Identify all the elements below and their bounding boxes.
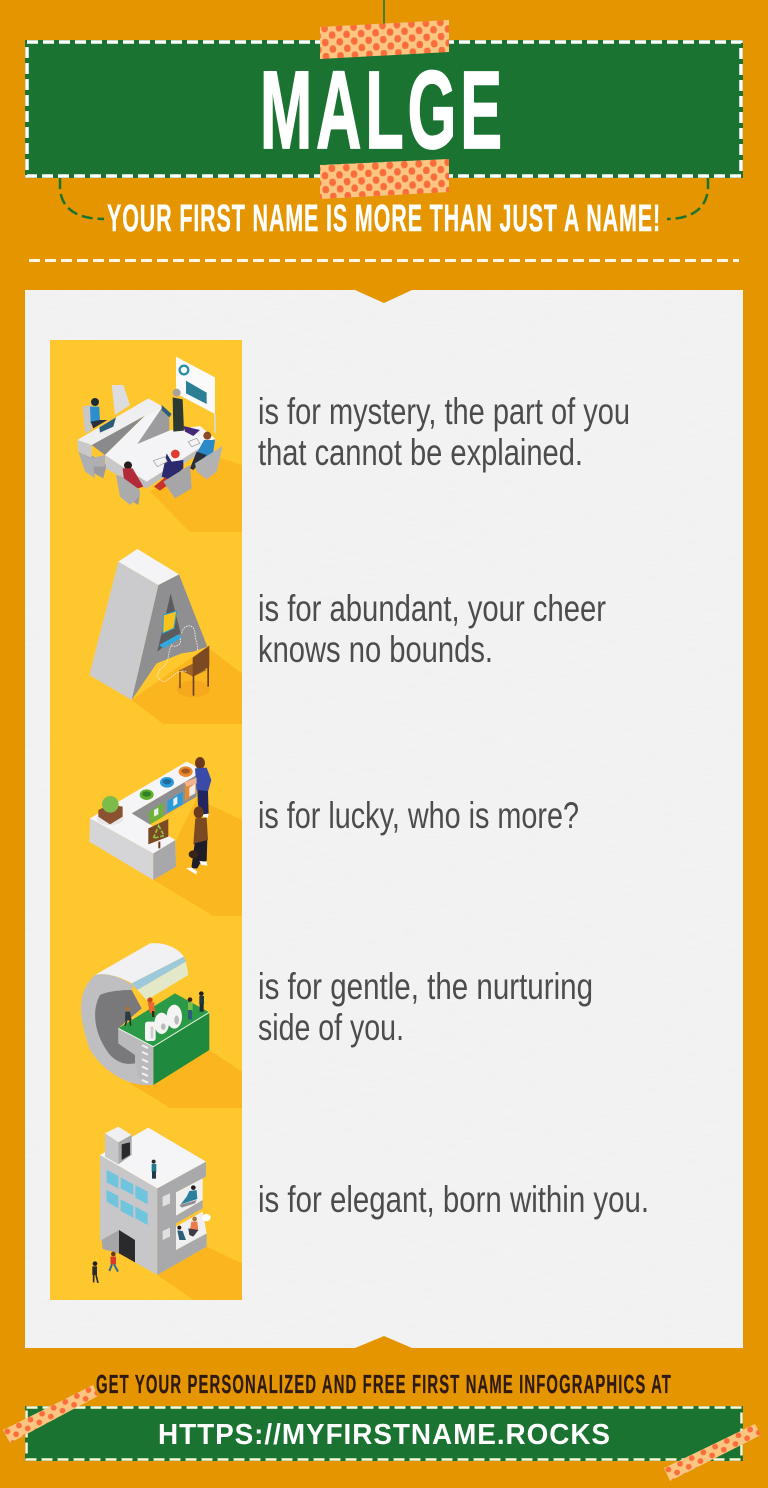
text: G line 2: side of you. [258,1007,404,1048]
hanging dashed string [383,0,385,24]
person: on roof [152,1160,156,1179]
person: walker [125,1007,132,1026]
text: L line: is for lucky, who is more? [258,795,579,836]
person: kicking [147,997,155,1017]
person: red shirt [109,1252,118,1272]
windows [107,1170,148,1225]
icon: planter [97,796,123,825]
tape: bottom [320,159,449,199]
footer banner [25,1406,743,1461]
title: MALGE [260,49,506,172]
icon: recycling sign [148,819,168,848]
numerals 123 [145,1005,182,1041]
person: brown jacket [186,806,208,874]
text: M line 2: that cannot be explained. [258,432,583,473]
yellow illustration column [50,340,242,1300]
illustration: letter A with desk [89,549,242,724]
dashed curve: left [60,178,104,219]
illustration: letter M meeting table [77,357,242,532]
white dashed divider [29,259,739,262]
person: dark suit [92,1261,98,1283]
footer url: HTTPS://MYFIRSTNAME.ROCKS [158,1419,611,1451]
tape: footer left [3,1385,98,1443]
text: A line: is for abundant, your cheer [258,588,606,629]
tape: top [320,20,449,59]
text: A line 2: knows no bounds. [258,629,493,670]
text: E line: is for elegant, born within you. [258,1179,649,1220]
text: M line: is for mystery, the part of you [258,391,630,432]
person: green [188,997,193,1019]
dashed curve: right [667,178,708,219]
person: blue shirt [184,757,211,818]
illustration: letter E building [92,1127,242,1300]
text: G line: is for gentle, the nurturing [258,966,593,1007]
illustration: letter L recycling station [89,757,242,916]
illustration: letter G with green roof [81,943,242,1108]
tape: footer right [664,1424,761,1481]
person: dark suit [199,991,204,1012]
main paper panel [25,290,743,1348]
people on balcony [177,1185,211,1240]
title banner [25,20,743,199]
